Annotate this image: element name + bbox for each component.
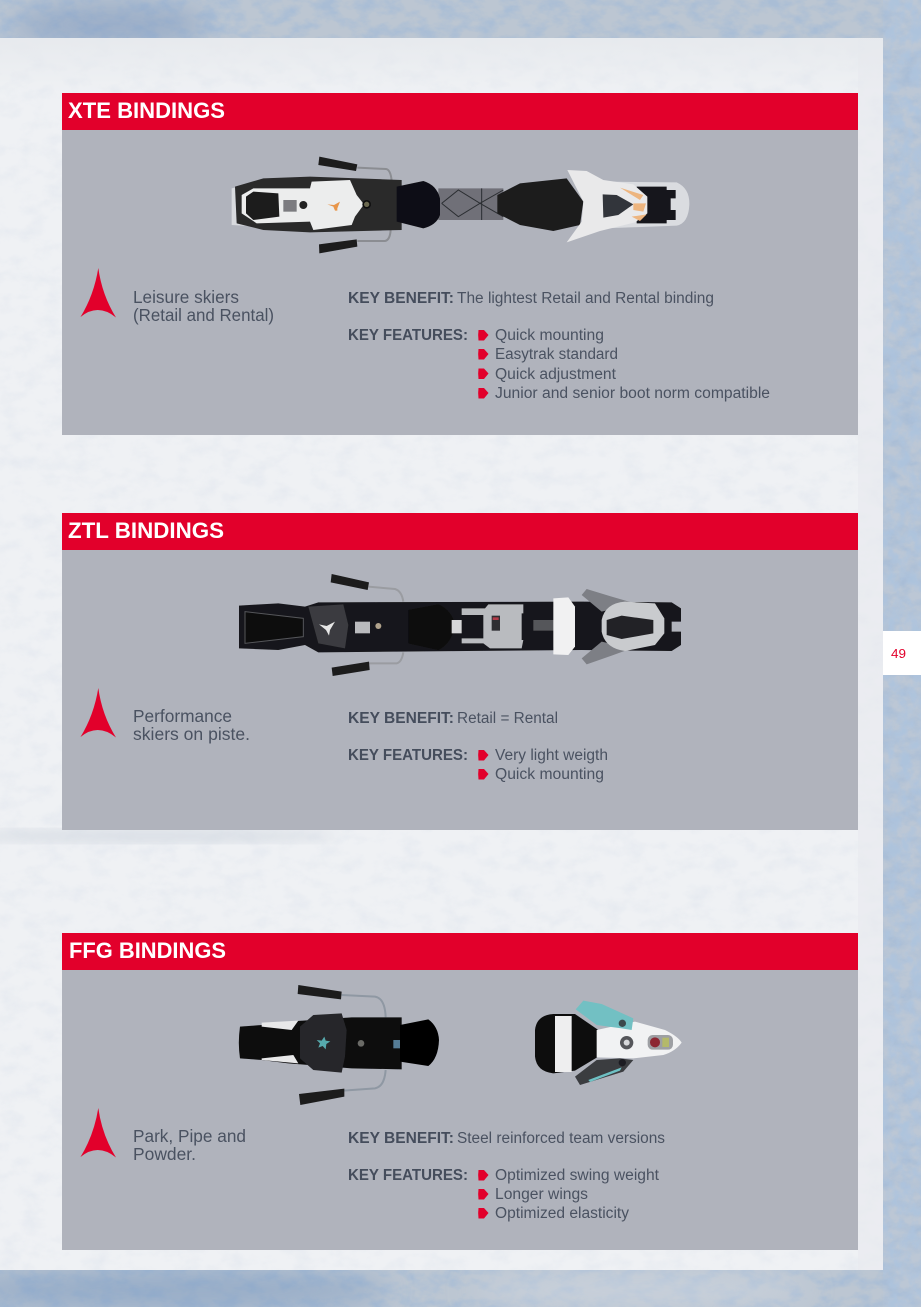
page number tab: 49 bbox=[891, 646, 906, 661]
heading bar: ZTL BINDINGS bbox=[68, 518, 224, 543]
key features list bbox=[348, 1167, 660, 1222]
key features list: Optimized elasticity bbox=[495, 1205, 629, 1222]
key features list bbox=[348, 747, 608, 783]
key benefit: The lightest Retail and Rental binding bbox=[457, 290, 714, 307]
target users text: (Retail and Rental) bbox=[133, 305, 274, 325]
icon: red spike bbox=[80, 688, 116, 738]
target users text: Leisure skiers bbox=[133, 287, 239, 307]
target users text bbox=[133, 1126, 246, 1164]
target users text: Powder. bbox=[133, 1144, 196, 1164]
target users text: skiers on piste. bbox=[133, 724, 250, 744]
key features list: Quick adjustment bbox=[495, 366, 617, 383]
key benefit bbox=[348, 710, 558, 727]
key features list bbox=[348, 327, 770, 402]
target users text bbox=[133, 706, 250, 744]
target users text: Performance bbox=[133, 706, 232, 726]
panel background bbox=[62, 550, 858, 830]
heading bar: FFG BINDINGS bbox=[69, 938, 226, 963]
icon: red spike bbox=[80, 1108, 116, 1158]
key features list: Junior and senior boot norm compatible bbox=[495, 385, 770, 402]
panel background bbox=[62, 970, 858, 1250]
key features list: KEY FEATURES: bbox=[348, 1167, 468, 1184]
product image: XTE binding bbox=[232, 157, 689, 253]
key features list: Optimized swing weight bbox=[495, 1167, 660, 1184]
heading bar: XTE BINDINGS bbox=[68, 98, 225, 123]
key benefit: KEY BENEFIT: bbox=[348, 710, 454, 727]
key benefit: KEY BENEFIT: bbox=[348, 1130, 454, 1147]
key features list: Easytrak standard bbox=[495, 346, 618, 363]
panel background bbox=[62, 130, 858, 435]
page number tab bbox=[883, 631, 921, 675]
key features list: Very light weigth bbox=[495, 747, 608, 764]
target users text bbox=[133, 287, 274, 325]
product image: FFG toe and heel bbox=[239, 985, 682, 1105]
key features list: KEY FEATURES: bbox=[348, 747, 468, 764]
heading bar bbox=[62, 933, 858, 970]
key features list: Quick mounting bbox=[495, 327, 604, 344]
product image: ZTL binding bbox=[239, 574, 681, 676]
panel: ZTL bindings bbox=[62, 513, 858, 830]
key benefit: Retail = Rental bbox=[457, 710, 558, 727]
key features list: KEY FEATURES: bbox=[348, 327, 468, 344]
panel: XTE bindings bbox=[62, 93, 858, 435]
icon: red spike bbox=[80, 268, 116, 318]
key benefit: Steel reinforced team versions bbox=[457, 1130, 665, 1147]
panel: FFG bindings bbox=[62, 933, 858, 1250]
key benefit: KEY BENEFIT: bbox=[348, 290, 454, 307]
key benefit bbox=[348, 1130, 665, 1147]
key features list: Longer wings bbox=[495, 1186, 588, 1203]
heading bar bbox=[62, 513, 858, 550]
key features list: Quick mounting bbox=[495, 766, 604, 783]
target users text: Park, Pipe and bbox=[133, 1126, 246, 1146]
heading bar bbox=[62, 93, 858, 130]
